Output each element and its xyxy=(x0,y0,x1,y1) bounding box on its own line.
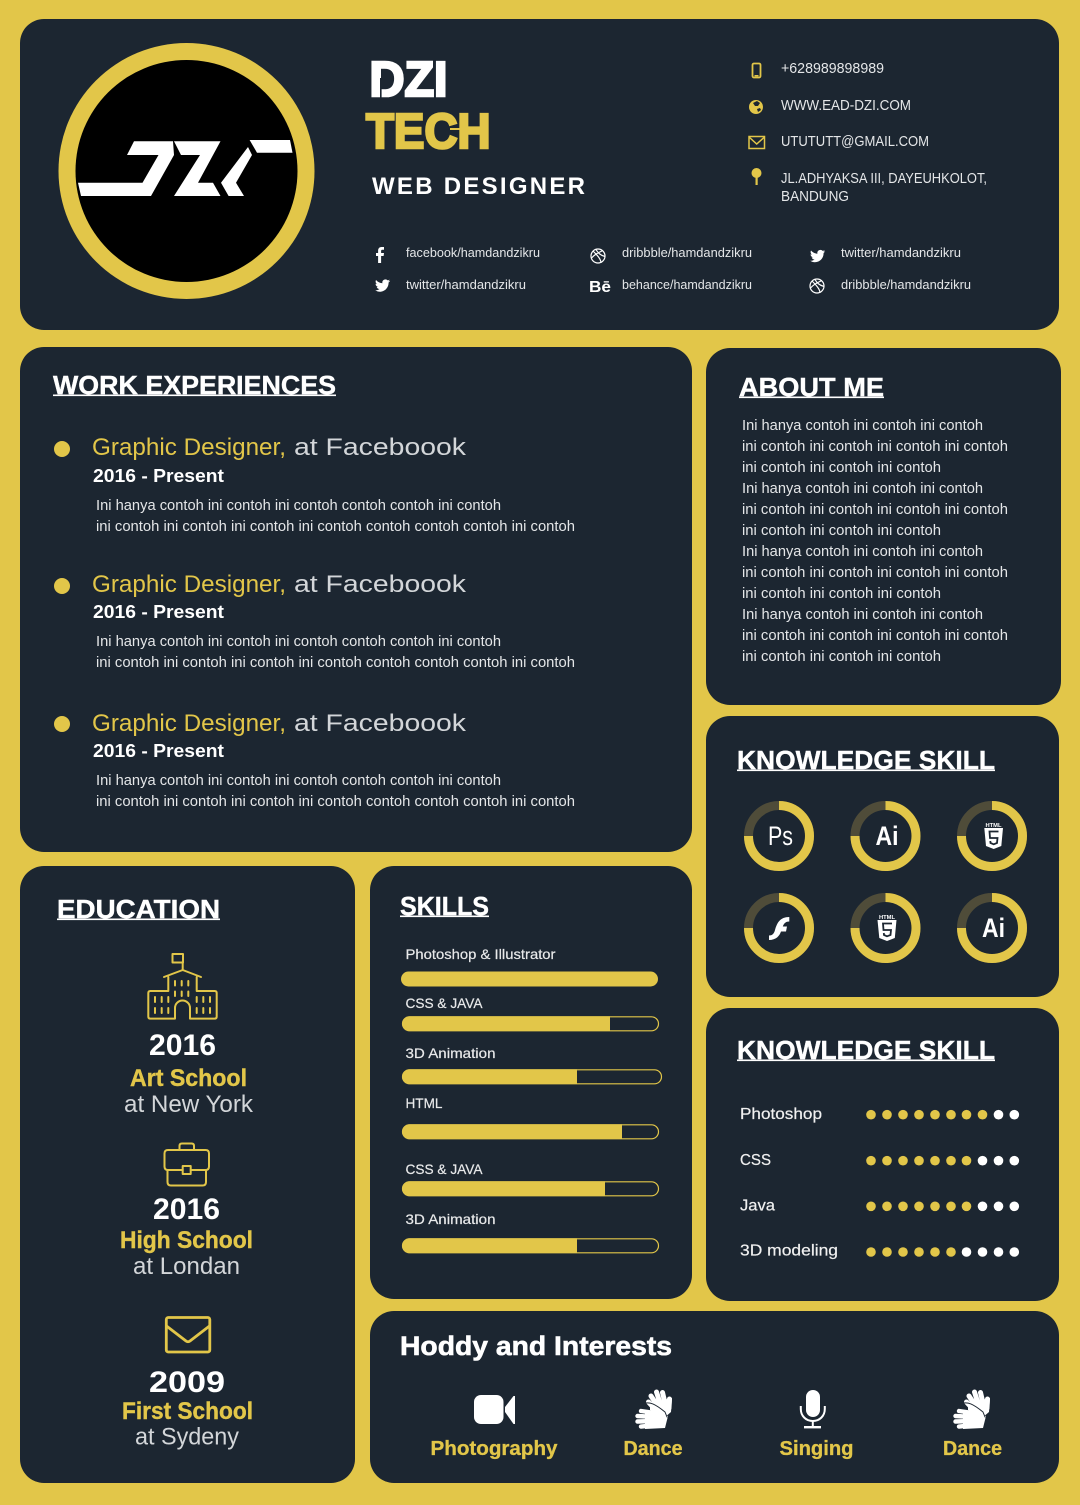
year 2016: 2016 xyxy=(153,1193,220,1226)
ring: HTML5: HTML xyxy=(879,915,896,921)
icon: video camera xyxy=(474,1395,515,1424)
panel: knowledge skill rings xyxy=(706,716,1059,997)
phone number: +628989898989 xyxy=(781,61,884,77)
rating: Java: Java xyxy=(740,1198,775,1214)
about text: Ini hanya contoh ini contoh ini contoh xyxy=(742,606,983,623)
about text xyxy=(742,417,1008,665)
panel: header xyxy=(20,19,1059,330)
heading: work experiences: WORK EXPERIENCES xyxy=(53,370,336,400)
icon: hands xyxy=(956,1392,990,1429)
ring: Photoshop: Ps xyxy=(768,821,793,851)
job entry 2: at Faceboook xyxy=(294,571,467,598)
about text: ini contoh ini contoh ini contoh xyxy=(742,522,941,539)
label: Singing: Singing xyxy=(780,1438,854,1460)
icon: behance: Bē xyxy=(589,279,611,296)
about text: Ini hanya contoh ini contoh ini contoh xyxy=(742,480,983,497)
skill: CSS & JAVA: CSS & JAVA xyxy=(406,995,483,1011)
skill: 3D Animation: 3D Animation xyxy=(406,1045,496,1061)
about text: Ini hanya contoh ini contoh ini contoh xyxy=(742,417,983,434)
website: WWW.EAD-DZI.COM xyxy=(781,98,911,114)
school: First School: First School xyxy=(122,1398,253,1425)
icon: dribbble xyxy=(591,249,605,263)
about text: ini contoh ini contoh ini contoh xyxy=(742,459,941,476)
panel: hobby and interests xyxy=(370,1311,1059,1483)
job title: WEB DESIGNER xyxy=(372,173,585,200)
job entry 2: Ini hanya contoh ini contoh ini contoh contoh contoh ini contoh xyxy=(96,633,501,650)
icon: envelope xyxy=(166,1318,210,1352)
year 2016: 2016 xyxy=(149,1029,216,1062)
rating: CSS xyxy=(740,1152,1019,1169)
job entry 1 xyxy=(54,434,575,535)
skill: 3D Animation: 3D Animation xyxy=(406,1211,496,1227)
job entry 1: Ini hanya contoh ini contoh ini contoh contoh contoh ini contoh xyxy=(96,497,501,514)
icon: mail xyxy=(749,136,764,148)
about text: ini contoh ini contoh ini contoh ini contoh xyxy=(742,627,1008,644)
heading: knowledge skill: KNOWLEDGE SKILL xyxy=(737,745,995,775)
ring: HTML5 xyxy=(962,806,1022,866)
rating: Photoshop xyxy=(740,1106,1019,1123)
icon: hands xyxy=(638,1392,672,1429)
logo badge xyxy=(58,43,314,299)
job entry 3 xyxy=(54,710,575,810)
icon: briefcase xyxy=(164,1144,209,1186)
icon: microphone xyxy=(801,1390,825,1428)
label: Photography: Photography xyxy=(430,1438,558,1460)
job entry 3: ini contoh ini contoh ini contoh ini contoh contoh contoh contoh ini contoh xyxy=(96,793,575,810)
job entry 1: 2016 - Present xyxy=(93,466,224,486)
panel: education xyxy=(20,866,355,1483)
about text: ini contoh ini contoh ini contoh xyxy=(742,648,941,665)
heading: about me: ABOUT ME xyxy=(739,372,884,402)
job entry 1: Graphic Designer, xyxy=(92,434,286,461)
heading: knowledge skill: KNOWLEDGE SKILL xyxy=(737,1035,995,1065)
icon: phone xyxy=(752,64,760,78)
panel: skills xyxy=(370,866,692,1299)
ring: Illustrator xyxy=(855,806,916,866)
job entry 3: at Faceboook xyxy=(294,710,467,737)
address xyxy=(781,171,987,205)
label: Dance: Dance xyxy=(943,1438,1002,1460)
icon: facebook xyxy=(376,247,384,263)
job entry 3: 2016 - Present xyxy=(93,741,224,761)
about text: ini contoh ini contoh ini contoh ini contoh xyxy=(742,501,1008,518)
name: DZI: DZI xyxy=(370,53,448,107)
icon: twitter xyxy=(375,279,390,292)
label: Dance: Dance xyxy=(624,1438,682,1460)
skill: CSS & JAVA: CSS & JAVA xyxy=(406,1161,483,1177)
year 2009: 2009 xyxy=(149,1366,225,1399)
ring: Illustrator: Ai xyxy=(876,821,898,851)
job entry 2: Graphic Designer, xyxy=(92,571,286,598)
rating: 3D modeling: 3D modeling xyxy=(740,1242,838,1260)
location: at Londan: at Londan xyxy=(133,1253,240,1280)
social: twitter: twitter/hamdandzikru xyxy=(406,277,526,292)
job entry 1: at Faceboook xyxy=(294,434,467,461)
address: BANDUNG xyxy=(781,189,849,205)
panel: work experiences xyxy=(20,347,692,852)
skill: CSS & JAVA xyxy=(402,995,658,1031)
heading: education: EDUCATION xyxy=(57,894,220,924)
social: dribbble: dribbble/hamdandzikru xyxy=(622,245,752,260)
ring: Illustrator xyxy=(962,898,1022,958)
ring: HTML5 xyxy=(855,898,916,958)
ring: Illustrator: Ai xyxy=(982,913,1005,943)
icon: dribbble xyxy=(810,279,824,293)
social: facebook: facebook/hamdandzikru xyxy=(406,245,540,260)
icon: school xyxy=(148,954,217,1019)
social: behance: behance/hamdandzikru xyxy=(622,277,752,292)
panel: about me xyxy=(706,348,1061,705)
social: twitter: twitter/hamdandzikru xyxy=(841,245,961,260)
skill: 3D Animation xyxy=(402,1211,658,1253)
icon: globe xyxy=(749,100,763,114)
rating: CSS: CSS xyxy=(740,1152,771,1169)
location: at Sydeny: at Sydeny xyxy=(135,1424,239,1450)
about text: Ini hanya contoh ini contoh ini contoh xyxy=(742,543,983,560)
social: dribbble: dribbble/hamdandzikru xyxy=(841,277,971,292)
email: UTUTUTT@GMAIL.COM xyxy=(781,134,929,150)
ring: Flash xyxy=(748,898,810,958)
job entry 3: Ini hanya contoh ini contoh ini contoh contoh contoh ini contoh xyxy=(96,772,501,789)
school: Art School: Art School xyxy=(130,1065,247,1092)
skill: HTML xyxy=(402,1095,658,1139)
about text: ini contoh ini contoh ini contoh ini contoh xyxy=(742,564,1008,581)
ring: Photoshop xyxy=(748,806,810,866)
job entry 2: 2016 - Present xyxy=(93,602,224,622)
skill: Photoshop & Illustrator xyxy=(401,946,658,986)
job entry 3: Graphic Designer, xyxy=(92,710,286,737)
job entry 2 xyxy=(54,571,575,671)
icon: location pin xyxy=(752,168,762,185)
rating: Photoshop: Photoshop xyxy=(740,1106,822,1123)
rating: Java xyxy=(740,1198,1019,1214)
ring: HTML5: HTML xyxy=(986,823,1002,829)
job entry 2: ini contoh ini contoh ini contoh ini contoh contoh contoh contoh ini contoh xyxy=(96,654,575,671)
name: TECH: TECH xyxy=(366,105,490,159)
skill: HTML: HTML xyxy=(406,1095,443,1111)
panel: knowledge skill dots xyxy=(706,1008,1059,1301)
rating: 3D modeling xyxy=(740,1242,1019,1260)
icon: twitter xyxy=(810,250,825,262)
heading: skills: SKILLS xyxy=(400,891,489,921)
address: JL.ADHYAKSA III, DAYEUHKOLOT, xyxy=(781,171,987,187)
about text: ini contoh ini contoh ini contoh ini contoh xyxy=(742,438,1008,455)
heading: hobby: Hoddy and Interests xyxy=(400,1331,672,1361)
job entry 1: ini contoh ini contoh ini contoh ini contoh contoh contoh contoh ini contoh xyxy=(96,518,575,535)
skill: 3D Animation xyxy=(402,1045,662,1084)
about text: ini contoh ini contoh ini contoh xyxy=(742,585,941,602)
skill: Photoshop & Illustrator: Photoshop & Illustrator xyxy=(406,946,556,962)
location: at New York: at New York xyxy=(124,1091,254,1118)
skill: CSS & JAVA xyxy=(402,1161,658,1196)
school: High School: High School xyxy=(120,1227,253,1254)
